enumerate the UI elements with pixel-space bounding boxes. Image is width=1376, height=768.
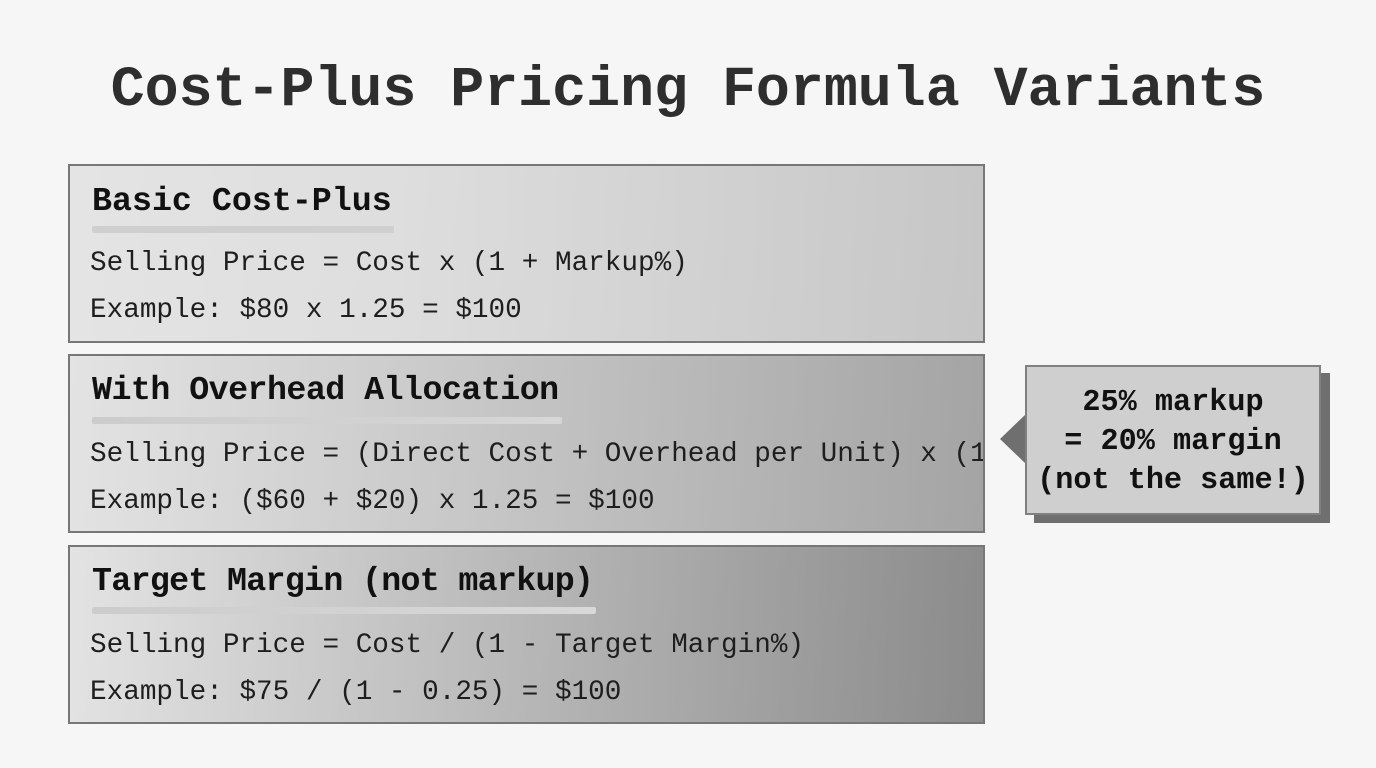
panel: target margin	[68, 545, 985, 724]
example: target margin: Example: $75 / (1 - 0.25) = $100	[90, 677, 621, 708]
callout box: (not the same!)	[1037, 464, 1309, 498]
panel: basic cost-plus	[68, 164, 985, 343]
heading underline: overhead	[92, 417, 562, 424]
heading: basic cost-plus: Basic Cost-Plus	[92, 182, 392, 220]
formula: basic: Selling Price = Cost x (1 + Markup%)	[90, 248, 688, 279]
heading: with overhead allocation: With Overhead Allocation	[92, 371, 559, 409]
callout box: = 20% margin	[1064, 425, 1282, 459]
example: basic: Example: $80 x 1.25 = $100	[90, 295, 522, 326]
callout arrow	[1000, 414, 1026, 464]
formula: target margin: Selling Price = Cost / (1 - Target Margin%)	[90, 630, 804, 661]
title: Cost-Plus Pricing Formula Variants	[111, 58, 1265, 122]
heading underline: target margin	[92, 607, 596, 614]
callout box: 25% markup	[1082, 386, 1264, 420]
callout shadow	[1034, 373, 1330, 523]
example: overhead: Example: ($60 + $20) x 1.25 = $100	[90, 486, 655, 517]
callout: markup versus margin	[1000, 365, 1330, 523]
heading underline: basic	[92, 226, 394, 233]
heading: target margin: Target Margin (not markup)	[92, 562, 593, 600]
callout box	[1025, 365, 1321, 515]
panel: with overhead allocation	[68, 354, 985, 533]
